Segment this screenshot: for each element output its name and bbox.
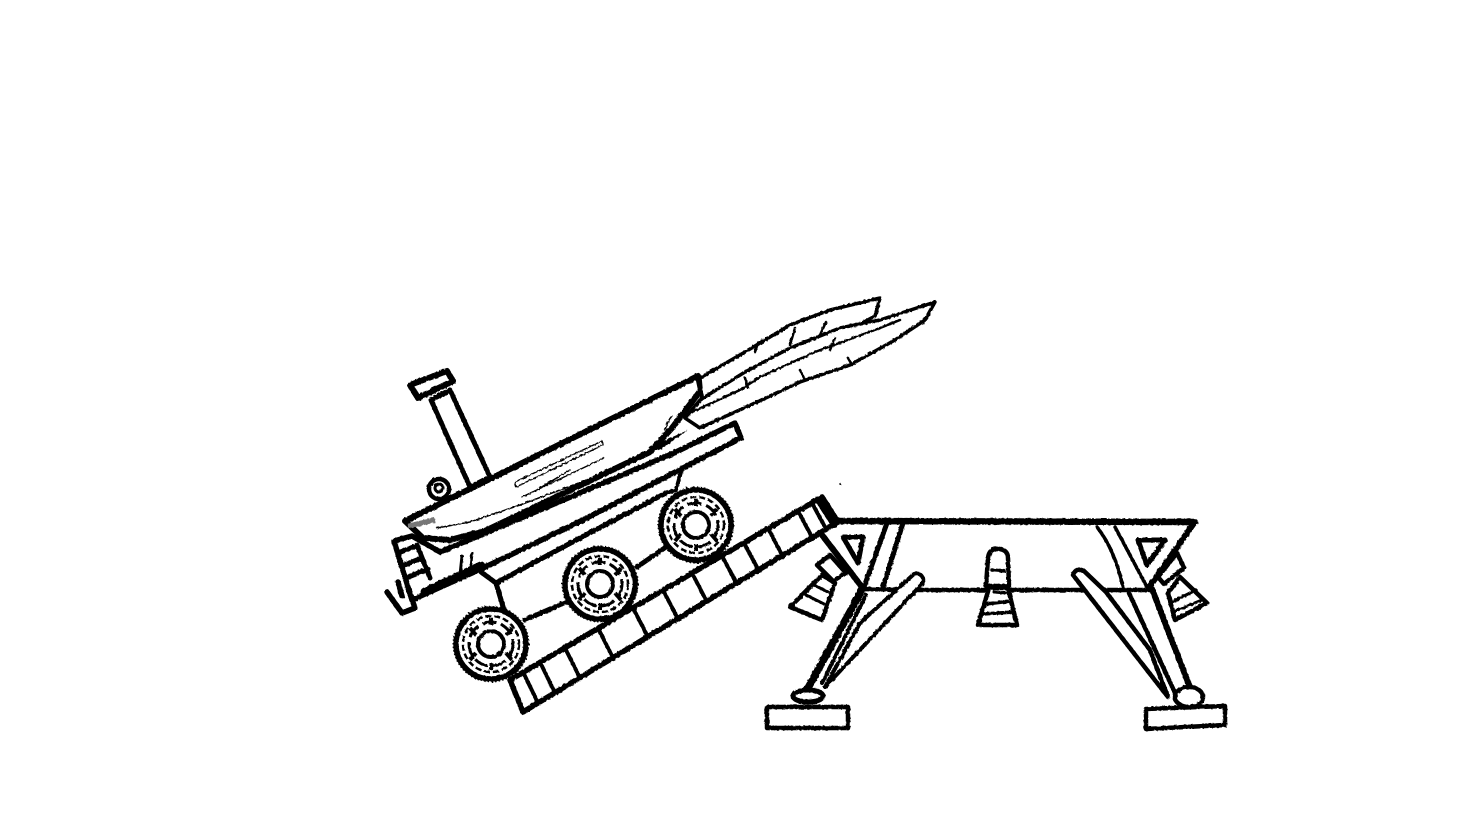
rover bbox=[387, 298, 935, 681]
rover wheel rear bbox=[454, 607, 528, 681]
rover rear hook bbox=[387, 582, 415, 613]
lander body bbox=[822, 521, 1195, 590]
debris speck bbox=[839, 483, 841, 485]
rover wheel front bbox=[659, 488, 733, 562]
rover deck box bbox=[394, 423, 741, 600]
rover lower chassis bbox=[481, 470, 681, 622]
rover wheel middle bbox=[563, 547, 637, 621]
lander right leg bbox=[1073, 570, 1191, 697]
rover folded wings bbox=[685, 298, 935, 428]
rover camera bbox=[429, 479, 449, 499]
lander bbox=[767, 521, 1225, 729]
lander left bracket bbox=[843, 537, 863, 563]
lander centre nozzle bbox=[978, 549, 1017, 625]
lander left leg bbox=[808, 574, 923, 688]
rover solar panel bbox=[405, 376, 701, 540]
ramp bbox=[510, 497, 838, 712]
lander right thruster bbox=[1158, 553, 1207, 620]
rover mast bbox=[410, 371, 490, 487]
lander right bracket bbox=[1138, 540, 1165, 565]
lander left thruster bbox=[790, 555, 846, 620]
lander left foot bbox=[767, 690, 848, 728]
lander right foot bbox=[1146, 687, 1225, 729]
